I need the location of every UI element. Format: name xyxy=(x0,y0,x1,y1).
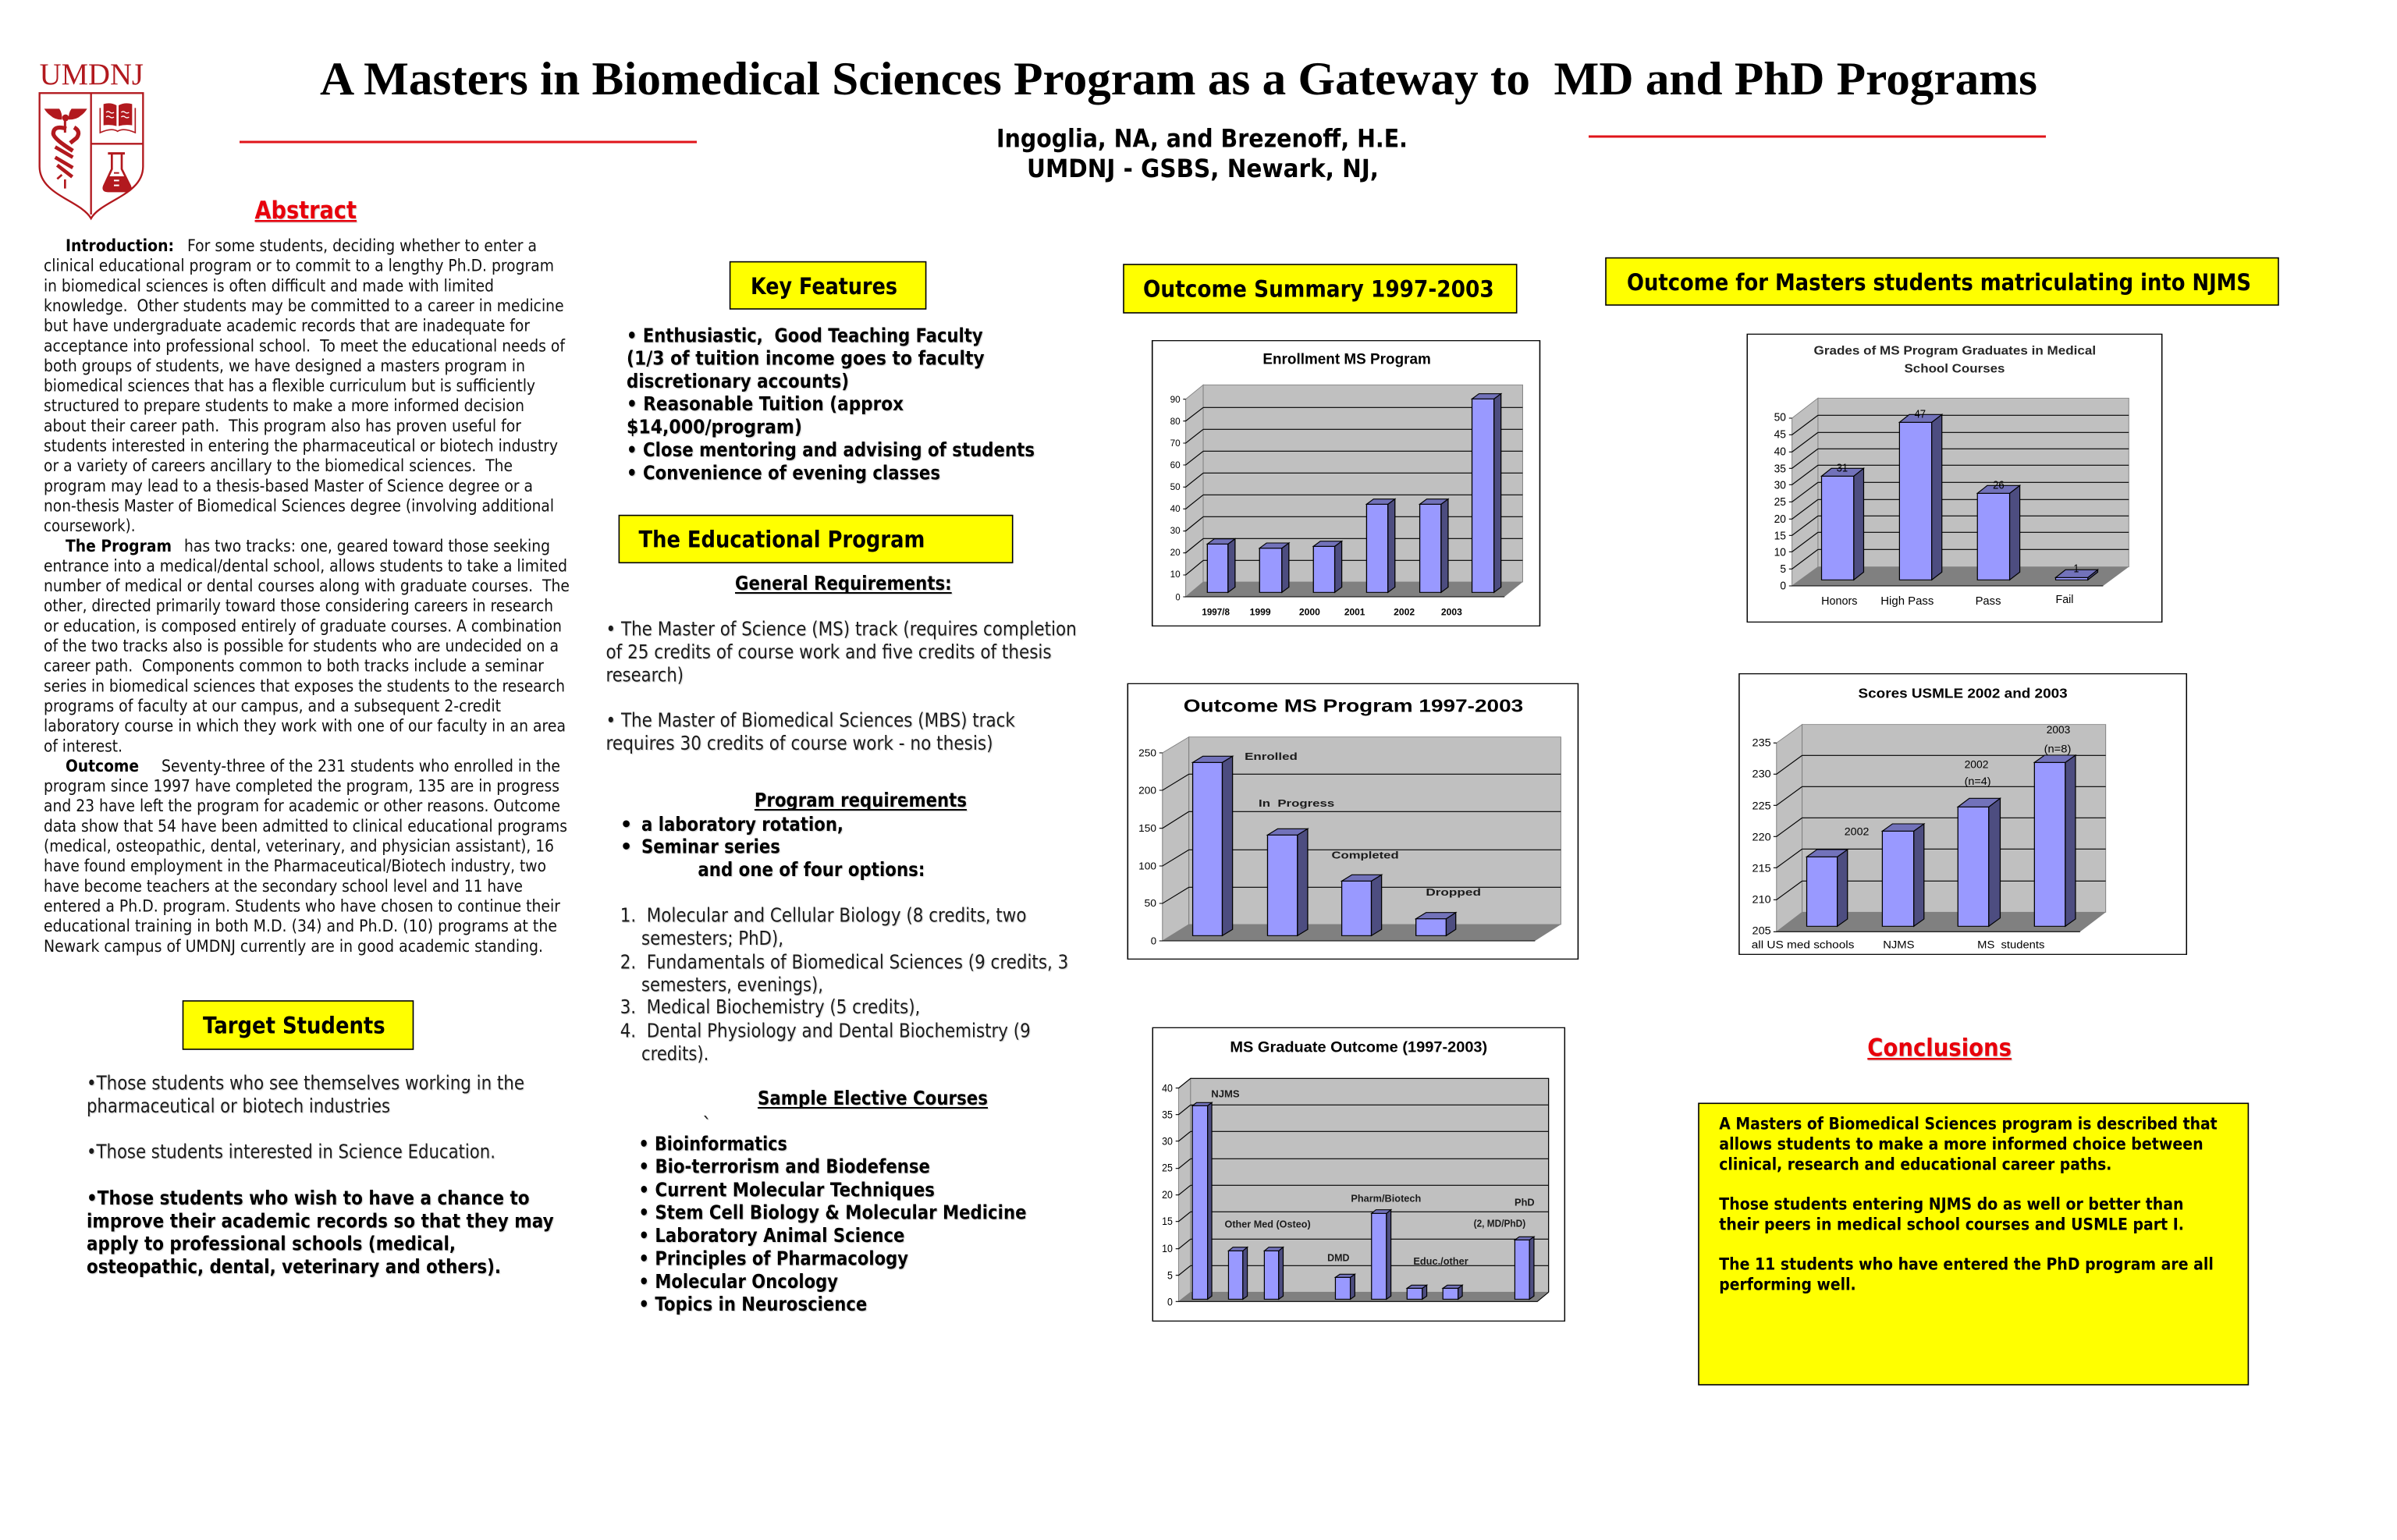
bar chart: Outcome MS Program 1997-2003: Dropped xyxy=(1426,887,1481,899)
text block: sample elective courses: • Stem Cell Biology & Molecular Medicine xyxy=(638,1201,1027,1224)
text block: general requirements xyxy=(605,572,1077,754)
bar chart: Scores USMLE 2002 and 2003: (n=4) xyxy=(1965,775,1991,788)
text block: key features list: • Close mentoring and advising of students xyxy=(627,438,1035,461)
abstract paragraph: introduction: structured to prepare students to make a more informed decision xyxy=(44,396,524,415)
abstract paragraph: introduction: both groups of students, we have designed a masters program in xyxy=(44,357,525,375)
abstract paragraph: the program: other, directed primarily toward those considering careers in research xyxy=(44,597,553,616)
panel: conclusions: performing well. xyxy=(1719,1275,1856,1293)
bar chart: Scores USMLE 2002 and 2003: 220 xyxy=(1752,831,1771,843)
bar chart: Grades of MS Program Graduates in Medical School Courses: Honors xyxy=(1821,595,1858,608)
text block: sample elective courses: • Principles of Pharmacology xyxy=(638,1247,908,1270)
right red rule xyxy=(1589,136,2046,137)
abstract paragraph: outcome: have found employment in the Pharmaceutical/Biotech industry, two xyxy=(44,857,546,875)
heading box: Outcome for Masters students matriculating into NJMS xyxy=(1606,258,2278,305)
text block: program requirements: semesters, evenings), xyxy=(641,974,823,996)
bar chart: Enrollment MS Program: 80 xyxy=(1170,416,1181,427)
left red rule xyxy=(240,140,697,144)
abstract paragraph: the program: laboratory course in which they work with one of our faculty in an area xyxy=(44,717,566,736)
bar: NJMS xyxy=(1192,1102,1212,1299)
bar: PhD xyxy=(1515,1237,1534,1299)
bar chart: Outcome MS Program 1997-2003: 100 xyxy=(1138,860,1156,871)
bar chart: MS Graduate Outcome (1997-2003): 35 xyxy=(1162,1109,1173,1121)
bar: high pass xyxy=(1899,414,1942,580)
bar: pharm/biotech xyxy=(1372,1210,1391,1299)
bar chart: Enrollment MS Program: 20 xyxy=(1170,547,1181,558)
bar chart: Enrollment MS Program: 10 xyxy=(1170,569,1181,580)
abstract paragraph: the program: number of medical or dental courses along with graduate courses. The xyxy=(44,577,570,595)
bar chart: Scores USMLE 2002 and 2003: 2002 xyxy=(1845,826,1869,838)
abstract paragraph: introduction: or a variety of careers ancillary to the biomedical sciences. The xyxy=(44,456,513,475)
bar chart: Scores USMLE 2002 and 2003: all US med schools xyxy=(1752,939,1855,951)
bar chart: Grades of MS Program Graduates in Medical School Courses: 26 xyxy=(1993,480,2005,491)
logo: UMDNJ shield xyxy=(40,57,144,218)
bar chart: MS Graduate Outcome (1997-2003): 25 xyxy=(1162,1163,1173,1174)
bar chart: Grades of MS Program Graduates in Medical School Courses xyxy=(1747,334,2162,622)
bar chart: Outcome MS Program 1997-2003: 0 xyxy=(1151,935,1156,946)
abstract paragraph: the program xyxy=(44,537,570,755)
bar chart: Outcome MS Program 1997-2003: Enrolled xyxy=(1245,751,1298,763)
text block: program requirements: 1. Molecular and Cellular Biology (8 credits, two xyxy=(620,904,1027,927)
abstract paragraph: outcome xyxy=(44,757,567,956)
authors and affiliation: UMDNJ - GSBS, Newark, NJ, xyxy=(1027,154,1379,183)
heading box: The Educational Program: The Educational Program xyxy=(638,527,925,553)
bar chart: Enrollment MS Program: 2001 xyxy=(1344,607,1365,617)
bar chart: Scores USMLE 2002 and 2003: 235 xyxy=(1752,737,1771,749)
bar chart: MS Graduate Outcome (1997-2003): 15 xyxy=(1162,1216,1173,1228)
bar chart: Scores USMLE 2002 and 2003: NJMS xyxy=(1883,939,1915,951)
text block: target students list: improve their academic records so that they may xyxy=(87,1209,554,1232)
panel: conclusions: The 11 students who have entered the PhD program are all xyxy=(1719,1254,2214,1273)
text block: program requirements: 3. Medical Biochemistry (5 credits), xyxy=(620,995,920,1018)
text block: program requirements xyxy=(620,789,1068,1065)
bar chart: Enrollment MS Program: 1997/8 xyxy=(1202,607,1230,617)
abstract paragraph: outcome: entered a Ph.D. program. Students who have chosen to continue their xyxy=(44,896,560,915)
bar chart: Outcome MS Program 1997-2003 xyxy=(1127,683,1578,959)
bar chart: MS Graduate Outcome (1997-2003): 10 xyxy=(1162,1244,1173,1255)
panel: conclusions xyxy=(1699,1103,2248,1385)
text block: sample elective courses: ` xyxy=(702,1113,712,1136)
bar: 2003 xyxy=(1472,394,1501,592)
text block: sample elective courses: • Bio-terrorism and Biodefense xyxy=(638,1155,930,1178)
bar chart: Outcome MS Program 1997-2003: 150 xyxy=(1138,822,1156,834)
abstract paragraph: introduction: non-thesis Master of Biomedical Sciences degree (involving additional xyxy=(44,496,554,515)
text block: key features list: • Enthusiastic, Good Teaching Faculty xyxy=(627,324,983,346)
bar chart: Scores USMLE 2002 and 2003: 2003 xyxy=(2047,724,2070,736)
bar chart: Grades of MS Program Graduates in Medical School Courses: 5 xyxy=(1780,563,1786,576)
bar chart: Enrollment MS Program: 2002 xyxy=(1394,607,1415,617)
abstract paragraph: the program: entrance into a medical/dental school, allows students to take a limited xyxy=(44,556,567,575)
abstract paragraph: the program: The Program xyxy=(66,537,172,555)
abstract paragraph: introduction: program may lead to a thesis-based Master of Science degree or a xyxy=(44,477,533,495)
bar: honors xyxy=(1822,468,1863,580)
bar chart: MS Graduate Outcome (1997-2003): DMD xyxy=(1327,1253,1350,1263)
bar chart: MS Graduate Outcome (1997-2003): (2, MD/PhD) xyxy=(1474,1218,1525,1229)
abstract paragraph: introduction: Introduction: xyxy=(66,236,174,255)
bar chart: Enrollment MS Program: 2000 xyxy=(1299,607,1320,617)
abstract paragraph: introduction xyxy=(44,236,566,535)
abstract paragraph: the program: has two tracks: one, geared toward those seeking xyxy=(184,537,550,555)
text block: program requirements: • xyxy=(620,835,632,858)
bar chart: Scores USMLE 2002 and 2003: (n=8) xyxy=(2044,743,2071,755)
bar chart: Grades of MS Program Graduates in Medical School Courses: 35 xyxy=(1774,463,1786,475)
bar: dropped xyxy=(1416,913,1456,935)
abstract paragraph: introduction: in biomedical sciences is often difficult and made with limited xyxy=(44,276,494,295)
bar chart: Enrollment MS Program: 30 xyxy=(1170,525,1181,536)
abstract paragraph: outcome: Outcome xyxy=(66,757,139,775)
panel: conclusions: clinical, research and educational career paths. xyxy=(1719,1155,2111,1173)
bar chart: MS Graduate Outcome (1997-2003): Other Med (Osteo) xyxy=(1224,1219,1311,1230)
text block: target students list: •Those students who see themselves working in the xyxy=(87,1072,524,1095)
bar chart: Outcome MS Program 1997-2003: 200 xyxy=(1138,785,1156,796)
abstract paragraph: outcome: program since 1997 have completed the program, 135 are in progress xyxy=(44,777,559,796)
abstract paragraph: the program: programs of faculty at our campus, and a subsequent 2-credit xyxy=(44,697,501,715)
bar chart: Grades of MS Program Graduates in Medical School Courses: High Pass xyxy=(1880,595,1934,608)
logo: UMDNJ shield: UMDNJ xyxy=(40,57,144,91)
text block: target students list: pharmaceutical or biotech industries xyxy=(87,1095,390,1117)
bar chart: Scores USMLE 2002 and 2003: 205 xyxy=(1752,924,1771,937)
abstract paragraph: outcome: have become teachers at the secondary school level and 11 have xyxy=(44,877,523,896)
bar chart: Enrollment MS Program: 2003 xyxy=(1441,607,1462,617)
bar: 1999 xyxy=(1259,543,1289,592)
text block: sample elective courses: • Laboratory Animal Science xyxy=(638,1224,904,1247)
bar chart: Grades of MS Program Graduates in Medical School Courses: 0 xyxy=(1780,580,1786,592)
bar chart: Grades of MS Program Graduates in Medical School Courses: 30 xyxy=(1774,480,1786,491)
heading box: Key Features: Key Features xyxy=(751,273,897,300)
panel: conclusions: A Masters of Biomedical Sciences program is described that xyxy=(1719,1114,2218,1133)
bar: DMD xyxy=(1335,1274,1355,1299)
panel: abstract text xyxy=(44,236,570,956)
bar chart: Enrollment MS Program: Enrollment MS Program xyxy=(1262,350,1431,367)
abstract paragraph: the program: of the two tracks also is possible for students who are undecided on a xyxy=(44,637,559,655)
bar chart: Grades of MS Program Graduates in Medical School Courses: 45 xyxy=(1774,428,1786,441)
text block: sample elective courses: • Bioinformatics xyxy=(638,1133,787,1155)
text block: sample elective courses: • Molecular Oncology xyxy=(638,1270,838,1293)
bar chart: MS Graduate Outcome (1997-2003): 40 xyxy=(1162,1083,1173,1095)
text block: general requirements: • The Master of Science (MS) track (requires completion xyxy=(605,618,1077,640)
abstract paragraph: introduction: coursework). xyxy=(44,516,136,535)
bar: other med xyxy=(1228,1247,1248,1299)
bar chart: Enrollment MS Program xyxy=(1152,341,1539,626)
bar: 2001 xyxy=(1366,499,1395,592)
bar chart: Grades of MS Program Graduates in Medical School Courses: Fail xyxy=(2056,594,2073,606)
text block: sample elective courses xyxy=(638,1087,1027,1315)
abstract paragraph: the program: series in biomedical sciences that exposes the students to the research xyxy=(44,676,565,695)
text block: program requirements: Program requirements xyxy=(755,789,967,811)
abstract paragraph: introduction: clinical educational program or to commit to a lengthy Ph.D. program xyxy=(44,257,554,275)
bar chart: MS Graduate Outcome (1997-2003): MS Graduate Outcome (1997-2003) xyxy=(1230,1039,1487,1056)
bar chart: Outcome MS Program 1997-2003: Outcome MS Program 1997-2003 xyxy=(1184,695,1523,716)
abstract paragraph: outcome: Seventy-three of the 231 students who enrolled in the xyxy=(162,757,560,775)
bar chart: MS Graduate Outcome (1997-2003) xyxy=(1152,1027,1564,1321)
abstract paragraph: the program: or education, is composed entirely of graduate courses. A combination xyxy=(44,616,562,635)
bar chart: Enrollment MS Program: 70 xyxy=(1170,438,1181,449)
bar: osteo xyxy=(1264,1247,1283,1299)
bar: pass xyxy=(1977,485,2020,580)
abstract paragraph: introduction: For some students, deciding whether to enter a xyxy=(187,236,537,255)
text block: program requirements: 2. Fundamentals of Biomedical Sciences (9 credits, 3 xyxy=(620,950,1068,973)
text block: target students list: •Those students who wish to have a chance to xyxy=(87,1187,530,1209)
bar chart: MS Graduate Outcome (1997-2003): Educ./other xyxy=(1413,1256,1468,1267)
bar chart: MS Graduate Outcome (1997-2003): 5 xyxy=(1167,1270,1173,1282)
bar: enrolled xyxy=(1193,756,1233,935)
abstract paragraph: introduction: but have undergraduate academic records that are inadequate for xyxy=(44,317,530,335)
abstract paragraph: outcome: data show that 54 have been admitted to clinical educational programs xyxy=(44,817,567,836)
bar chart: Scores USMLE 2002 and 2003: 210 xyxy=(1752,893,1771,906)
heading: Conclusions: Conclusions xyxy=(1867,1034,2012,1062)
text block: program requirements: Seminar series xyxy=(641,835,780,858)
abstract paragraph: introduction: acceptance into professional school. To meet the educational needs of xyxy=(44,336,566,355)
bar chart: Scores USMLE 2002 and 2003: 225 xyxy=(1752,800,1771,812)
bar: other xyxy=(1443,1285,1462,1299)
heading: Abstract: Abstract xyxy=(254,197,357,225)
bar chart: Enrollment MS Program: 50 xyxy=(1170,481,1181,492)
bar chart: Grades of MS Program Graduates in Medical School Courses: 1 xyxy=(2073,562,2079,575)
bar: in progress xyxy=(1267,829,1308,935)
panel: conclusions: their peers in medical school courses and USMLE part I. xyxy=(1719,1215,2184,1234)
bar chart: MS Graduate Outcome (1997-2003): NJMS xyxy=(1211,1089,1240,1099)
text block: general requirements: requires 30 credits of course work - no thesis) xyxy=(605,732,993,754)
text block: key features list xyxy=(627,324,1035,484)
abstract paragraph: introduction: students interested in entering the pharmaceutical or biotech industry xyxy=(44,437,558,456)
bar chart: MS Graduate Outcome (1997-2003): 30 xyxy=(1162,1137,1173,1148)
bar chart: Grades of MS Program Graduates in Medical School Courses: School Courses xyxy=(1905,363,2005,375)
bar chart: Grades of MS Program Graduates in Medical School Courses: 20 xyxy=(1774,513,1786,526)
abstract paragraph: outcome: (medical, osteopathic, dental, veterinary, and physician assistant), 16 xyxy=(44,836,554,855)
bar chart: MS Graduate Outcome (1997-2003): Pharm/Biotech xyxy=(1351,1194,1421,1204)
bar chart: MS Graduate Outcome (1997-2003): PhD xyxy=(1515,1198,1535,1208)
heading box: Key Features xyxy=(730,262,926,309)
panel: conclusions: Those students entering NJMS do as well or better than xyxy=(1719,1195,2183,1214)
bar chart: MS Graduate Outcome (1997-2003): 20 xyxy=(1162,1190,1173,1201)
text block: target students list: osteopathic, dental, veterinary and others). xyxy=(87,1255,501,1278)
bar chart: Outcome MS Program 1997-2003: In Progress xyxy=(1259,798,1334,810)
bar chart: Outcome MS Program 1997-2003: Completed xyxy=(1332,850,1399,861)
heading box: Outcome Summary 1997-2003: Outcome Summary 1997-2003 xyxy=(1143,276,1494,303)
text block: general requirements: General Requirements: xyxy=(735,572,952,594)
text block: program requirements: and one of four options: xyxy=(698,858,925,881)
bar chart: Grades of MS Program Graduates in Medical School Courses: 47 xyxy=(1915,409,1926,420)
abstract paragraph: outcome: educational training in both M.D. (34) and Ph.D. (10) programs at the xyxy=(44,917,557,935)
bar chart: Enrollment MS Program: 1999 xyxy=(1250,607,1271,617)
bar chart: Scores USMLE 2002 and 2003: 2002 xyxy=(1965,759,1988,771)
bar chart: Enrollment MS Program: 40 xyxy=(1170,503,1181,514)
heading box: Target Students xyxy=(183,1001,414,1049)
bar chart: Enrollment MS Program: 0 xyxy=(1176,592,1181,602)
text block: key features list: (1/3 of tuition income goes to faculty xyxy=(627,346,985,369)
authors and affiliation xyxy=(996,123,1408,183)
text block: key features list: • Reasonable Tuition (approx xyxy=(627,392,904,415)
bar chart: Scores USMLE 2002 and 2003: 215 xyxy=(1752,863,1771,875)
bar chart: Grades of MS Program Graduates in Medical School Courses: Pass xyxy=(1976,595,2001,608)
bar chart: Scores USMLE 2002 and 2003: MS students xyxy=(1977,939,2045,951)
text block: program requirements: semesters; PhD), xyxy=(641,927,783,949)
bar chart: Outcome MS Program 1997-2003: 250 xyxy=(1138,747,1156,758)
text block: target students list xyxy=(87,1072,554,1278)
bar chart: MS Graduate Outcome (1997-2003): 0 xyxy=(1167,1297,1173,1308)
bar: MS students 2003 xyxy=(2034,755,2076,926)
abstract paragraph: outcome: and 23 have left the program for academic or other reasons. Outcome xyxy=(44,797,560,815)
text block: target students list: apply to professional schools (medical, xyxy=(87,1233,456,1255)
bar chart: Enrollment MS Program: 60 xyxy=(1170,460,1181,470)
bar chart: Enrollment MS Program: 90 xyxy=(1170,394,1181,405)
heading box: Target Students: Target Students xyxy=(203,1012,385,1038)
panel: conclusions: allows students to make a more informed choice between xyxy=(1719,1134,2203,1153)
text block: program requirements: a laboratory rotation, xyxy=(641,813,843,836)
bar: MS students 2002 xyxy=(1958,798,2000,926)
text block: general requirements: • The Master of Biomedical Sciences (MBS) track xyxy=(605,709,1016,732)
abstract paragraph: introduction: knowledge. Other students may be committed to a career in medicine xyxy=(44,296,564,315)
bar chart: Grades of MS Program Graduates in Medical School Courses: 15 xyxy=(1774,530,1786,542)
bar: all US med schools xyxy=(1807,850,1848,926)
heading box: Outcome for Masters students matriculating into NJMS: Outcome for Masters students matriculating into NJMS xyxy=(1627,269,2251,296)
bar chart: Scores USMLE 2002 and 2003 xyxy=(1739,674,2186,954)
bar chart: Grades of MS Program Graduates in Medical School Courses: 40 xyxy=(1774,445,1786,458)
bar: 2002 xyxy=(1420,499,1448,592)
bar: 1997/8 xyxy=(1207,539,1235,592)
bar chart: Grades of MS Program Graduates in Medical School Courses: Grades of MS Program Graduates in Medical xyxy=(1814,345,2096,357)
abstract paragraph: the program: career path. Components common to both tracks include a seminar xyxy=(44,657,544,676)
bar chart: Grades of MS Program Graduates in Medical School Courses: 25 xyxy=(1774,496,1786,509)
bar: 2000 xyxy=(1313,541,1342,592)
bar: NJMS xyxy=(1882,824,1924,926)
heading box: Outcome Summary 1997-2003 xyxy=(1124,264,1517,313)
bar chart: Grades of MS Program Graduates in Medical School Courses: 31 xyxy=(1837,462,1848,474)
bar: educ xyxy=(1407,1285,1427,1299)
text block: sample elective courses: • Topics in Neuroscience xyxy=(638,1293,867,1315)
text block: key features list: discretionary accounts) xyxy=(627,370,849,392)
title: A Masters in Biomedical Sciences Program as a Gateway to MD and PhD Programs xyxy=(320,53,2037,105)
text block: general requirements: research) xyxy=(605,664,684,687)
text block: general requirements: of 25 credits of course work and five credits of thesis xyxy=(605,640,1052,663)
text block: program requirements: 4. Dental Physiology and Dental Biochemistry (9 xyxy=(620,1019,1031,1042)
abstract paragraph: introduction: about their career path. This program also has proven useful for xyxy=(44,417,521,435)
text block: key features list: $14,000/program) xyxy=(627,415,802,438)
text block: program requirements: • xyxy=(620,813,632,836)
text block: sample elective courses: Sample Elective Courses xyxy=(758,1087,988,1109)
bar chart: Scores USMLE 2002 and 2003: 230 xyxy=(1752,768,1771,780)
abstract paragraph: introduction: biomedical sciences that has a flexible curriculum but is sufficiently xyxy=(44,377,535,396)
text block: program requirements: credits). xyxy=(641,1042,708,1065)
bar chart: Scores USMLE 2002 and 2003: Scores USMLE 2002 and 2003 xyxy=(1859,686,2068,701)
bar chart: Outcome MS Program 1997-2003: 50 xyxy=(1145,897,1156,909)
authors and affiliation: Ingoglia, NA, and Brezenoff, H.E. xyxy=(996,123,1408,153)
heading box: The Educational Program xyxy=(619,516,1013,562)
abstract paragraph: the program: of interest. xyxy=(44,736,123,755)
bar chart: Grades of MS Program Graduates in Medical School Courses: 50 xyxy=(1774,411,1786,424)
abstract paragraph: outcome: Newark campus of UMDNJ currently are in good academic standing. xyxy=(44,937,543,956)
text block: target students list: •Those students interested in Science Education. xyxy=(87,1141,495,1163)
text block: sample elective courses: • Current Molecular Techniques xyxy=(638,1178,935,1201)
bar: fail xyxy=(2056,570,2097,580)
text block: key features list: • Convenience of evening classes xyxy=(627,462,940,484)
bar chart: Grades of MS Program Graduates in Medical School Courses: 10 xyxy=(1774,547,1786,559)
bar: completed xyxy=(1342,875,1382,935)
